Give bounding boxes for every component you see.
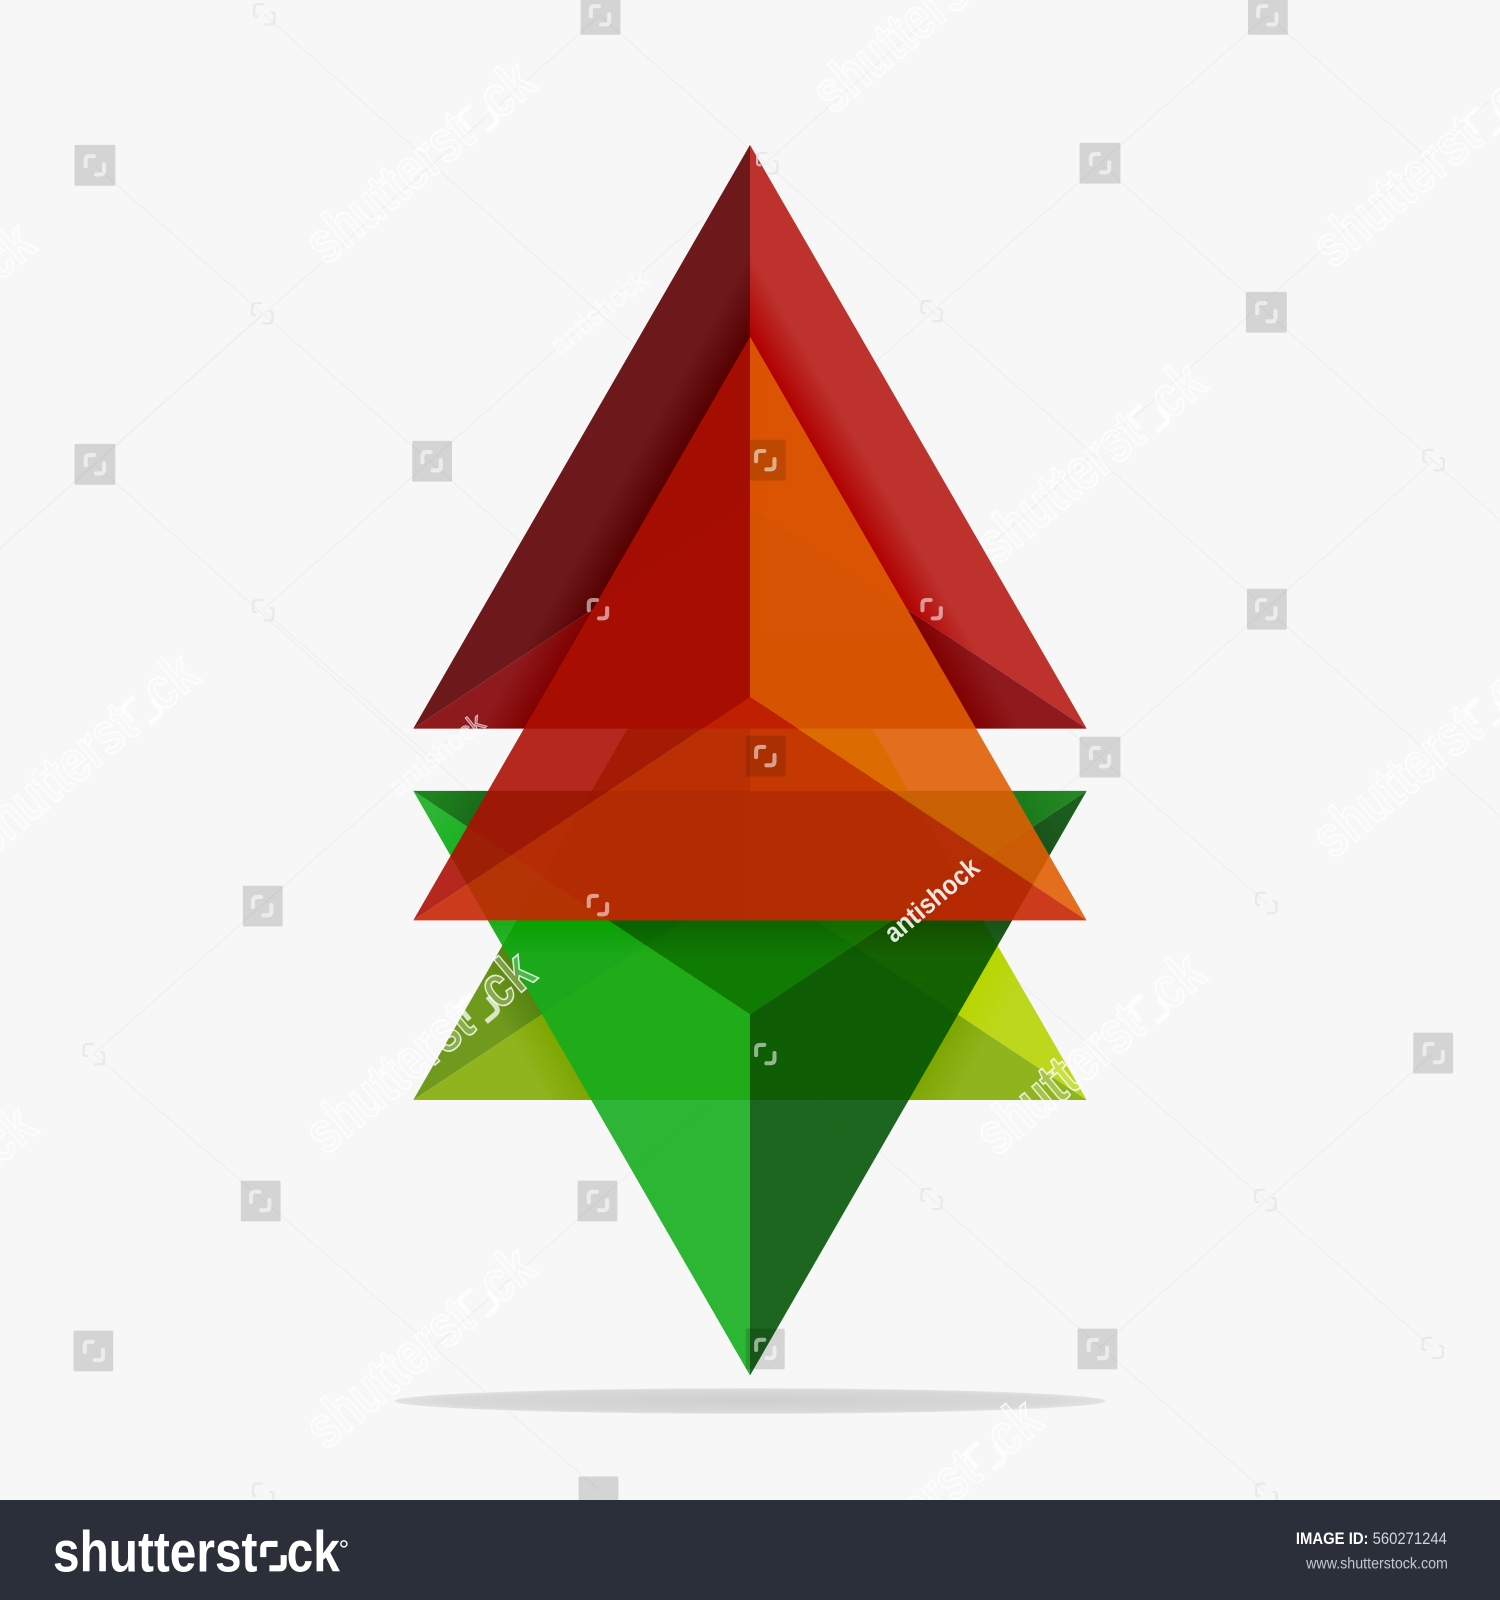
green left facet (413, 791, 750, 1376)
watermark text: antishock (878, 851, 986, 948)
green right facet (750, 791, 1087, 1376)
watermark text: shutterstock (291, 1231, 547, 1461)
logo wordmark: shutterstock (53, 1520, 340, 1584)
green top facet (413, 791, 1087, 1014)
big red right facet (750, 145, 1087, 729)
watermark text: shutterstock (962, 938, 1217, 1167)
front lower facet (413, 697, 1087, 920)
website: www.shutterstock.com (1305, 1555, 1448, 1572)
lime left facet (413, 516, 750, 1100)
front right facet (750, 337, 1087, 920)
watermark text: shutterstock (962, 347, 1217, 576)
footer bar (0, 1500, 1500, 1600)
big red lower facets (413, 505, 1087, 729)
image id: IMAGE ID: 560271244 (1296, 1530, 1447, 1548)
lime right facet (750, 516, 1087, 1100)
ground shadow (395, 1388, 1105, 1414)
watermark text: shutterstock (291, 47, 547, 276)
triangle: big red upward (413, 145, 1087, 729)
front left facet (413, 337, 750, 920)
triangle: red-orange front (413, 337, 1087, 920)
watermark text: shutterstock (291, 937, 547, 1166)
watermark text: antishock (544, 263, 654, 361)
triangle: green downward (413, 791, 1087, 1376)
watermark text: antishock (382, 707, 491, 803)
big red left facet (413, 145, 750, 729)
triangle: lime upward (413, 516, 1087, 1100)
lime lower facets (413, 877, 1087, 1100)
